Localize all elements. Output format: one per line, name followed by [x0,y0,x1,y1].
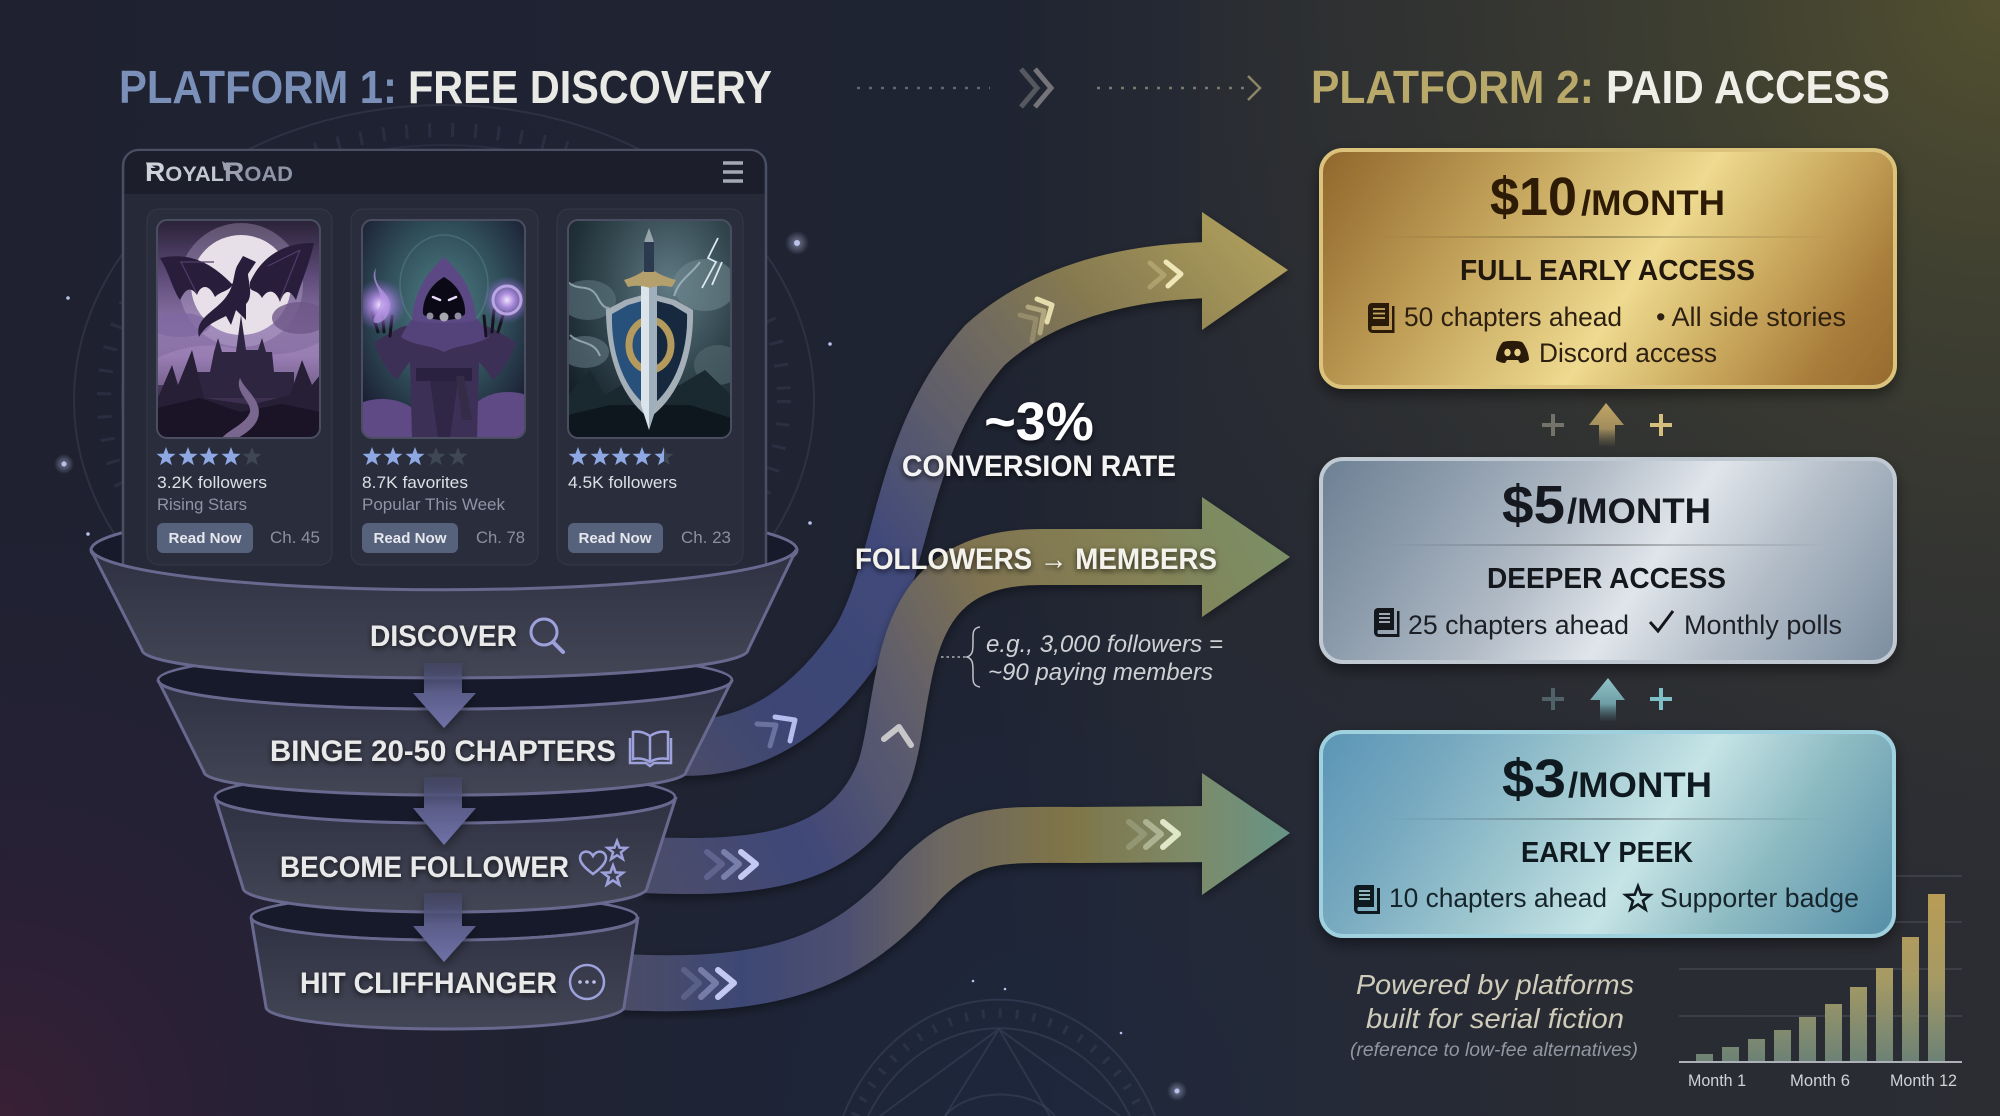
tier card: $5 silver: Monthly polls [1684,610,1842,640]
icon: heart and stars [580,841,626,885]
cover: hooded mage [363,221,524,437]
tier card: $5 silver: 25 chapters ahead [1408,610,1629,640]
tier card: $5 silver: /MONTH [1567,492,1711,531]
label: binge chapters: BINGE 20-50 CHAPTERS [270,735,616,768]
icon: search [531,619,563,652]
label: become follower [280,841,626,885]
label: discover: DISCOVER [370,620,517,653]
funnel down arrows [413,663,476,962]
button: Read Now [168,530,242,547]
button: Read Now [578,530,652,547]
callout: conversion rate: ~3% [984,392,1094,452]
label: become follower: BECOME FOLLOWER [280,851,569,884]
text: powered by platforms [1350,969,1638,1061]
funnel [91,508,797,1029]
tier card: $3 teal: Supporter badge [1660,883,1859,913]
tier card: $10 gold: Discord access [1539,338,1717,368]
chart: monthly growth [1679,876,1962,1090]
note: example calculation: e.g., 3,000 followers = [986,631,1223,658]
logo: ROYALROAD [145,157,293,187]
icon: book [1374,608,1400,637]
button: Read Now [374,530,447,547]
flow arrow: to $10 tier [670,212,1288,748]
rating [156,447,262,465]
chart: monthly growth: Month 6 [1790,1072,1850,1090]
tier card: $10 gold: $10 [1490,167,1577,227]
label: hit cliffhanger: HIT CLIFFHANGER [300,967,557,1000]
tier card: $3 teal: /MONTH [1568,766,1712,805]
icon: open book [630,732,671,766]
icon: book [1368,303,1394,333]
tier card: $5 silver: $5 [1502,475,1565,535]
tier card: $10 gold: • All side stories [1656,302,1846,332]
icon: book [1354,885,1380,914]
funnel tier 2: binge [158,651,732,795]
tier card: $3 teal: $3 [1502,749,1566,809]
tier card: $3 teal [1321,732,1894,936]
upgrade arrow: teal [1542,678,1672,721]
card: mage story: Popular This Week [362,495,505,514]
funnel rim: top opening [91,508,797,592]
rating [568,447,674,465]
card: mage story: Ch. 78 [476,529,525,547]
flow arrow: to $5 tier [645,497,1290,877]
tier card: $5 silver: DEEPER ACCESS [1487,563,1726,595]
arrow: dotted separator between platforms [857,69,1260,107]
panel: RoyalRoad browser [123,150,766,618]
tier card: $10 gold [1321,150,1895,387]
button [157,523,253,553]
callout: conversion rate: CONVERSION RATE [902,450,1176,483]
card: dragon story: Ch. 45 [270,529,320,547]
upgrade arrow: gold [1542,403,1672,446]
button [568,523,663,553]
callout: conversion rate [902,392,1176,483]
title: platform 1: FREE DISCOVERY [408,61,772,113]
chart: monthly growth: Month 12 [1890,1072,1957,1090]
card: dragon story: 3.2K followers [157,473,267,492]
tier card: $5 silver [1321,459,1895,662]
note: example calculation: ~90 paying members [988,659,1213,686]
title: platform 2: PAID ACCESS [1606,61,1890,113]
tier card: $10 gold: 50 chapters ahead [1404,302,1622,332]
card: mage story: 8.7K favorites [362,473,468,492]
button [362,523,458,553]
funnel tier 1: discover [91,550,796,678]
funnel tier 3: become follower [215,771,676,912]
card: sword story: Ch. 23 [681,529,731,547]
title: platform 1: PLATFORM 1: [119,61,397,113]
tier card: $3 teal: 10 chapters ahead [1389,883,1607,913]
tier card: $10 gold: /MONTH [1581,184,1725,223]
rating [362,447,468,465]
tier card: $3 teal: EARLY PEEK [1521,837,1693,869]
callout: followers to members: FOLLOWERS → MEMBERS [855,543,1217,576]
cover: dragon and castle [158,221,319,437]
card: dragon story: Rising Stars [157,495,247,514]
flow arrow: to $3 tier [620,773,1290,997]
cover: sword and shield [569,221,730,437]
title: platform 1 [119,61,772,113]
text: powered by platforms: Powered by platforms [1356,969,1634,1000]
icon: speech dots [570,965,604,999]
tier card: $10 gold: FULL EARLY ACCESS [1460,255,1755,287]
icon: discord [1496,341,1529,363]
text: powered by platforms: (reference to low-fee alternatives) [1350,1040,1638,1061]
card: mage story [342,209,548,565]
card: dragon story [147,209,332,565]
note: example calculation [941,627,1223,687]
funnel tier 4: hit cliffhanger [251,894,638,1029]
icon: menu [723,163,743,181]
title: platform 2: PLATFORM 2: [1311,61,1594,113]
card: sword story [557,209,743,565]
chart: monthly growth: Month 1 [1688,1072,1746,1090]
icon: star [1626,886,1650,910]
text: powered by platforms: built for serial fiction [1366,1003,1624,1034]
title: platform 2 [1311,61,1890,113]
icon: check [1650,611,1673,631]
card: sword story: 4.5K followers [568,473,677,492]
